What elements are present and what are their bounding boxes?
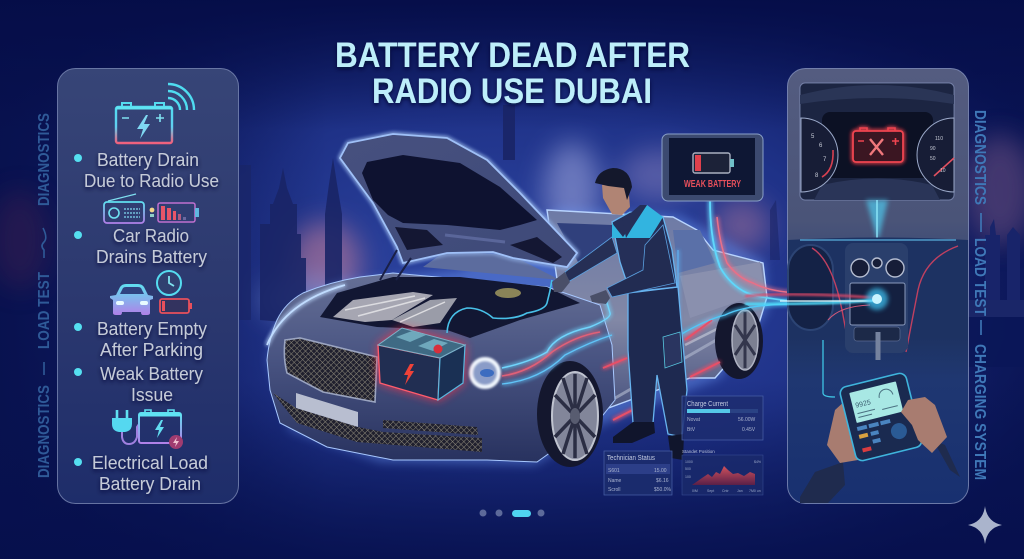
right hand — [901, 397, 947, 453]
charge current card: BtV — [687, 427, 696, 433]
left gauge — [801, 118, 838, 192]
left arm — [565, 237, 617, 282]
scan tool in hands — [800, 372, 960, 503]
headlight — [471, 359, 499, 387]
label: weak battery issue: Weak Battery — [100, 364, 203, 384]
title — [335, 36, 690, 111]
left gauge: 7 — [823, 157, 827, 163]
panel: symptoms — [58, 68, 238, 504]
label: battery drain due to radio use — [84, 150, 219, 191]
line area chart: 1000 — [685, 460, 693, 464]
sparkle icon — [968, 506, 1002, 544]
technician status card: S601 — [608, 468, 620, 474]
right vertical caption: CHARGING SYSTEM — [971, 344, 988, 480]
left gauge: 6 — [819, 143, 823, 149]
label: battery drain due to radio use: Due to Radio Use — [84, 171, 219, 191]
line area chart: Sept — [707, 489, 714, 493]
smoke — [260, 142, 770, 322]
front wheel — [537, 361, 603, 467]
boots — [613, 422, 684, 460]
bullet — [74, 154, 82, 162]
connection wire — [823, 340, 835, 397]
technician status card: Scroll — [608, 487, 621, 493]
bullet — [74, 368, 82, 376]
left hand — [827, 400, 860, 463]
label: weak battery issue — [100, 364, 203, 405]
line area chart — [682, 449, 763, 495]
right vertical caption: LOAD TEST — [971, 238, 988, 316]
charge current card: 56.00W — [738, 417, 756, 423]
energy lines — [267, 200, 800, 420]
line area chart: 100 — [685, 475, 691, 479]
rear wheel — [715, 303, 763, 379]
bullet — [74, 458, 82, 466]
line area chart: Jan — [737, 489, 743, 493]
engine bay — [320, 277, 580, 338]
right vertical caption — [971, 110, 988, 480]
label: car radio drains battery: Car Radio — [113, 226, 189, 246]
label: battery empty after parking — [97, 319, 207, 360]
torso — [612, 212, 677, 292]
lower grille — [273, 393, 482, 452]
right gauge: 50 — [930, 156, 936, 162]
label: weak battery issue: Issue — [131, 385, 173, 405]
right gauge: 10 — [940, 168, 946, 174]
right gauge: 110 — [935, 136, 943, 142]
right gauge: 90 — [930, 146, 936, 152]
license plate — [296, 393, 358, 427]
label: electrical load battery drain: Battery Drain — [99, 474, 201, 494]
weak battery screen — [662, 134, 763, 201]
battery — [378, 328, 465, 400]
bullet — [74, 231, 82, 239]
leg pocket — [663, 332, 682, 368]
car rear body and roof — [547, 210, 767, 410]
head — [602, 183, 630, 215]
label: electrical load battery drain: Electrical Load — [92, 453, 208, 473]
technician status card: Technician Status — [607, 455, 655, 462]
charge current card — [682, 396, 763, 440]
air vents — [851, 258, 904, 277]
city skyline — [238, 105, 1024, 324]
car with open hood — [267, 134, 800, 467]
left vertical caption: LOAD TEST — [36, 272, 53, 349]
bumper mesh — [383, 420, 478, 435]
line area chart: Cntr — [722, 489, 729, 493]
scan tool: 9925 — [855, 399, 872, 410]
left gauge: 5 — [811, 134, 815, 140]
label: car radio drains battery — [96, 226, 207, 267]
icon: plug and battery — [112, 410, 183, 449]
technician status card: $50.0% — [654, 487, 672, 493]
line area chart: 7M0 un — [749, 489, 761, 493]
bullet — [74, 323, 82, 331]
technician status card: Name — [608, 478, 622, 484]
high-vis collar and shoulders — [612, 205, 663, 238]
technician status card — [604, 451, 672, 495]
light beam — [866, 200, 888, 238]
left vertical caption: DIAGNOSTICS — [36, 113, 53, 206]
technician status card: $6.16 — [656, 478, 669, 484]
inner shirt and collar — [622, 205, 647, 238]
carousel dots — [480, 510, 544, 517]
energy beam — [745, 288, 888, 320]
open hood — [340, 134, 577, 280]
icon: battery with wireless signal — [116, 84, 194, 143]
line area chart: 0/M — [692, 489, 698, 493]
panel: diagnostic tools — [745, 68, 968, 504]
car front body — [267, 273, 615, 462]
icon: battery warning — [853, 128, 903, 162]
icon: car with clock and empty battery — [110, 271, 192, 315]
scan tool — [839, 372, 923, 462]
grille — [284, 338, 377, 402]
charge current card: 0.45V — [742, 427, 756, 433]
legs — [628, 287, 687, 437]
line area chart: $4% — [754, 460, 761, 464]
technician status card: 15.00 — [654, 468, 667, 474]
left gauge: 8 — [815, 173, 819, 179]
right arm — [607, 225, 675, 297]
gloves — [552, 272, 610, 304]
label: battery empty after parking: After Parking — [100, 340, 203, 360]
label: battery drain due to radio use: Battery Drain — [97, 150, 199, 170]
right gauge — [917, 118, 954, 192]
left vertical caption — [36, 113, 53, 478]
technician — [552, 168, 687, 460]
left vertical caption: DIAGNOSTICS — [36, 385, 53, 478]
windshield — [423, 250, 560, 280]
title: RADIO USE DUBAI — [372, 72, 652, 111]
icon: weak battery — [693, 153, 734, 173]
charge current card: Novat — [687, 417, 701, 423]
car dashboard — [788, 238, 968, 380]
label: WEAK BATTERY — [684, 179, 741, 190]
line area chart: Standet Position — [682, 449, 715, 454]
label: electrical load battery drain — [92, 453, 208, 494]
instrument cluster — [800, 83, 954, 200]
title: BATTERY DEAD AFTER — [335, 36, 690, 75]
car glow — [268, 208, 768, 465]
line area chart: 500 — [685, 467, 691, 471]
charge current card: Charge Current — [687, 401, 728, 408]
sleeves — [800, 440, 960, 503]
icon: radio and low battery — [104, 194, 199, 223]
hair — [595, 168, 632, 200]
label: car radio drains battery: Drains Battery — [96, 247, 207, 267]
right vertical caption: DIAGNOSTICS — [971, 110, 988, 205]
label: battery empty after parking: Battery Empty — [97, 319, 207, 339]
